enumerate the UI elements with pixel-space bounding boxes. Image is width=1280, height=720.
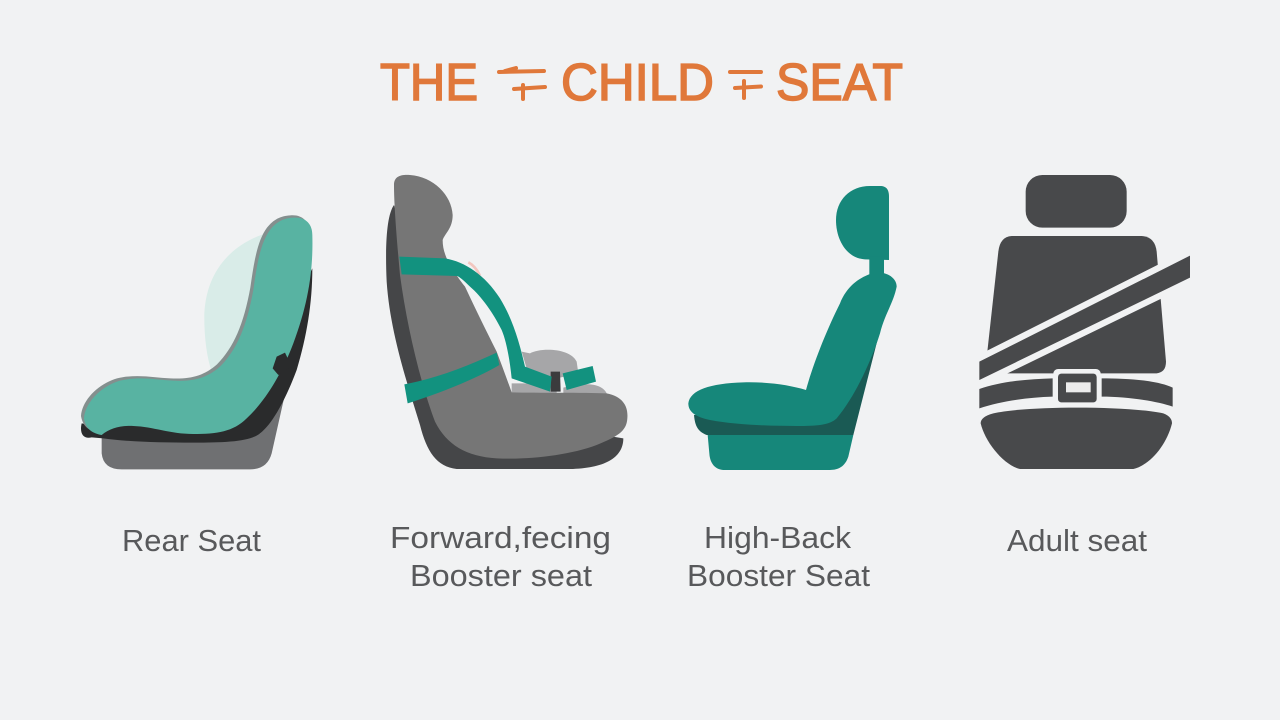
icon: high-back seat <box>688 186 897 470</box>
icon: adult seat with belt <box>973 175 1190 469</box>
title: SEAT <box>776 54 903 112</box>
icon: forward-facing seat <box>386 175 627 469</box>
title: CHILD <box>561 54 714 112</box>
title: THE <box>380 54 478 112</box>
label: high-back booster seat <box>687 520 870 593</box>
title <box>380 54 903 112</box>
panel: adult seat <box>973 175 1190 558</box>
panel: rear seat <box>81 215 312 558</box>
icon: rear-facing seat <box>81 215 312 469</box>
panel: high-back booster seat <box>687 186 897 593</box>
label: forward-facing booster seat <box>390 520 611 593</box>
icon: second title glyph <box>730 72 761 98</box>
label: adult seat: Adult seat <box>1007 523 1147 558</box>
label: forward-facing booster seat: Forward,fecing <box>390 520 611 555</box>
icon: first title glyph <box>499 68 545 99</box>
label: high-back booster seat: Booster Seat <box>687 558 870 593</box>
label: forward-facing booster seat: Booster seat <box>410 558 592 593</box>
label: high-back booster seat: High-Back <box>704 520 852 555</box>
panel: forward-facing booster seat <box>386 175 627 593</box>
label: rear seat: Rear Seat <box>122 523 261 558</box>
